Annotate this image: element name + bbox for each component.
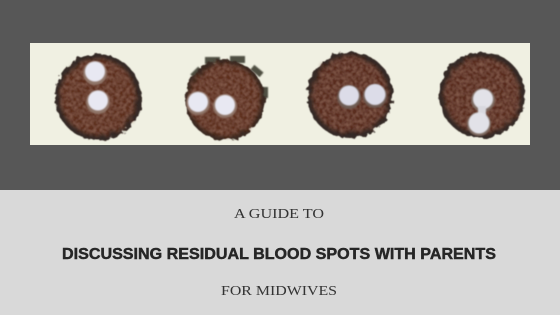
blood spot 4 — [439, 52, 525, 138]
blood spot 1 — [55, 54, 141, 140]
text: a guide to: A GUIDE TO — [234, 207, 324, 222]
title: DISCUSSING RESIDUAL BLOOD SPOTS WITH PARENTS — [62, 246, 496, 263]
panel: dark header background — [0, 0, 560, 190]
blood spot 2 — [185, 56, 268, 140]
panel: blood spot card photo — [30, 43, 530, 145]
blood spot 3 — [307, 52, 393, 138]
panel: light caption background — [0, 190, 560, 315]
text: for midwives: FOR MIDWIVES — [221, 284, 337, 299]
